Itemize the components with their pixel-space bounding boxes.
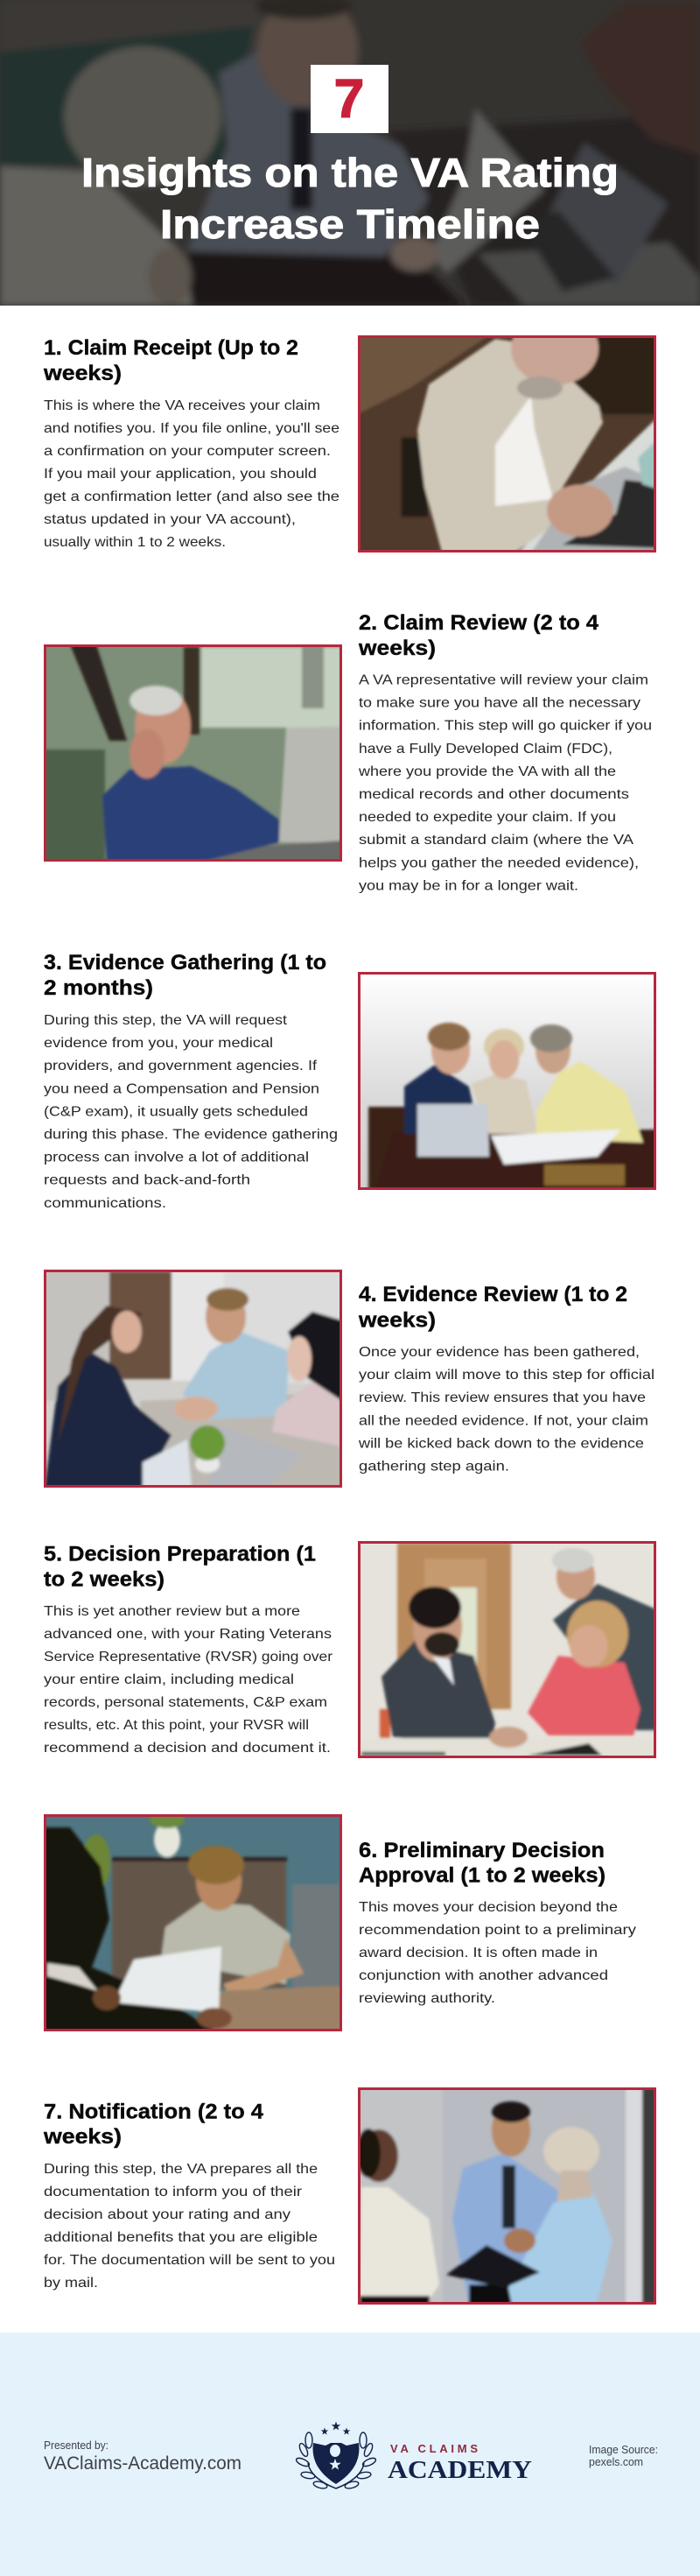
text block: step 7: decision about your rating and any <box>44 2207 290 2222</box>
text block: step 2: information. This step will go quicker if you <box>359 719 652 734</box>
text block: step 4: your claim will move to this step for official <box>359 1368 654 1383</box>
text block: step 3: you need a Compensation and Pension <box>44 1081 319 1096</box>
heading: step 7: 7. Notification (2 to 4 <box>44 2100 263 2123</box>
text block: step 2: where you provide the VA with all the <box>358 764 616 779</box>
photo: man on phone at laptop <box>44 644 342 862</box>
title: Insights on the VA Rating <box>81 150 619 195</box>
heading: step 7: weeks) <box>43 2125 122 2149</box>
heading: step 3 <box>44 951 326 1000</box>
heading: step 3: 3. Evidence Gathering (1 to <box>44 951 326 975</box>
heading: step 1: weeks) <box>43 362 122 385</box>
text block: step 4: will be kicked back down to the evidence <box>358 1436 644 1451</box>
heading: step 5 <box>44 1542 316 1591</box>
text block: step 2: A VA representative will review your claim <box>359 672 648 688</box>
text block: step 1: status updated in your VA account), <box>44 512 296 527</box>
text block: step 7: by mail. <box>44 2276 98 2291</box>
text block: step 3: (C&P exam), it usually gets scheduled <box>44 1104 308 1119</box>
text block: step 3: During this step, the VA will request <box>44 1013 288 1028</box>
text block: step 2: to make sure you have all the necessary <box>359 696 640 711</box>
text block: step 6 <box>359 1900 636 2006</box>
heading: step 3: 2 months) <box>44 976 153 1000</box>
text block: step 3: during this phase. The evidence gathering <box>44 1128 338 1142</box>
text block: step 6: conjunction with another advanced <box>359 1968 608 1983</box>
title: Increase Timeline <box>160 201 540 247</box>
text block: step 4: gathering step again. <box>359 1459 509 1475</box>
number badge: 7 <box>334 69 364 130</box>
text block: step 3: evidence from you, your medical <box>44 1036 273 1051</box>
logo wordmark: ACADEMY <box>388 2456 532 2484</box>
text block: step 1 <box>44 398 340 550</box>
text block: step 2: needed to expedite your claim. If you <box>359 810 616 825</box>
panel: step 6 preliminary decision approval <box>44 1811 636 2031</box>
text block: step 6: This moves your decision beyond the <box>359 1900 618 1915</box>
text block: step 3: communications. <box>44 1196 166 1211</box>
heading: step 6: Approval (1 to 2 weeks) <box>359 1863 606 1887</box>
heading: step 2: weeks) <box>358 637 436 660</box>
text block: step 1: a confirmation on your computer screen. <box>44 444 331 459</box>
heading: step 4 <box>358 1283 627 1333</box>
text block: step 5: Service Representative (RVSR) going over <box>44 1650 333 1665</box>
text block: step 2: helps you gather the needed evidence), <box>359 855 639 870</box>
text block: step 5 <box>44 1604 333 1756</box>
text block: step 4: Once your evidence has been gathered, <box>359 1345 640 1360</box>
logo: VA Claims Academy <box>295 2422 532 2489</box>
image source <box>589 2443 658 2468</box>
text block: step 1: and notifies you. If you file online, you'll see <box>44 421 340 436</box>
photo: agent meeting couple <box>44 1270 342 1488</box>
text block: step 6: recommendation point to a preliminary <box>359 1923 636 1938</box>
heading: step 7 <box>43 2100 263 2149</box>
text block: step 6: reviewing authority. <box>359 1991 495 2006</box>
photo: man across desk with paper <box>44 1814 342 2031</box>
text block: step 6: award decision. It is often made in <box>359 1946 598 1960</box>
text block: step 3: providers, and government agencies. If <box>44 1059 318 1073</box>
text block: step 2: have a Fully Developed Claim (FDC), <box>359 742 612 757</box>
text block: step 7: documentation to inform you of their <box>44 2185 303 2199</box>
logo wordmark <box>388 2442 532 2484</box>
photo: colleagues shaking hands <box>358 2087 656 2305</box>
panel: step 2 claim review <box>44 611 652 893</box>
text block: step 4 <box>358 1345 654 1475</box>
photo: man typing on laptop <box>358 335 656 553</box>
text block: step 1: get a confirmation letter (and also see the <box>44 489 340 504</box>
hero photo <box>0 0 700 306</box>
text block: step 5: your entire claim, including medical <box>44 1672 294 1687</box>
panel: step 4 evidence review <box>44 1270 654 1488</box>
text block: step 3: process can involve a lot of additional <box>44 1151 309 1165</box>
footer <box>0 2333 700 2576</box>
text block: step 2: medical records and other documents <box>359 787 629 802</box>
photo: man signing with couple <box>358 1541 656 1758</box>
title <box>81 150 619 247</box>
text block: step 2: you may be in for a longer wait. <box>359 878 578 893</box>
hero banner <box>0 0 700 306</box>
text block: step 7: for. The documentation will be sent to you <box>44 2253 335 2268</box>
panel: step 5 decision preparation <box>44 1541 656 1758</box>
text block: step 5: results, etc. At this point, your RVSR will <box>44 1718 309 1733</box>
text block: step 7 <box>44 2162 335 2291</box>
text block: step 7: During this step, the VA prepares all the <box>44 2162 318 2177</box>
presented by: Presented by: <box>44 2439 108 2452</box>
presented by: VAClaims-Academy.com <box>44 2453 242 2474</box>
text block: step 1: This is where the VA receives your claim <box>44 398 320 413</box>
heading: step 6 <box>359 1839 606 1887</box>
text block: step 3 <box>44 1013 338 1211</box>
text block: step 1: usually within 1 to 2 weeks. <box>44 535 226 550</box>
heading: step 2: 2. Claim Review (2 to 4 <box>359 611 598 635</box>
text block: step 5: recommend a decision and document it. <box>44 1741 331 1756</box>
logo wordmark: VA CLAIMS <box>390 2442 478 2455</box>
heading: step 2 <box>358 611 598 660</box>
presented by <box>44 2439 242 2474</box>
panel: step 1 claim receipt <box>43 312 656 553</box>
text block: step 5: advanced one, with your Rating Veterans <box>44 1627 332 1642</box>
image source: Image Source: <box>589 2443 658 2456</box>
text block: step 4: review. This review ensures that you have <box>359 1390 646 1405</box>
text block: step 4: all the needed evidence. If not, your claim <box>359 1413 648 1428</box>
panel: step 3 evidence gathering <box>44 951 656 1211</box>
text block: step 3: requests and back-and-forth <box>44 1173 250 1188</box>
text block: step 5: This is yet another review but a more <box>44 1604 300 1619</box>
heading: step 5: to 2 weeks) <box>44 1567 164 1591</box>
heading: step 5: 5. Decision Preparation (1 <box>44 1542 316 1566</box>
text block: step 2 <box>358 672 652 893</box>
text block: step 5: records, personal statements, C&P exam <box>44 1695 327 1710</box>
heading: step 4: 4. Evidence Review (1 to 2 <box>359 1283 627 1306</box>
image source: pexels.com <box>589 2455 643 2468</box>
panel: step 7 notification <box>43 2087 656 2305</box>
number badge <box>311 65 388 133</box>
text block: step 2: submit a standard claim (where the VA <box>359 833 634 848</box>
text block: step 7: additional benefits that you are eligible <box>44 2230 318 2245</box>
photo: three people at table <box>358 972 656 1190</box>
heading: step 1 <box>43 336 298 385</box>
heading: step 4: weeks) <box>358 1308 436 1333</box>
heading: step 6: 6. Preliminary Decision <box>359 1839 605 1862</box>
icon: eagle crest <box>295 2422 377 2489</box>
text block: step 1: If you mail your application, you should <box>44 467 317 482</box>
heading: step 1: 1. Claim Receipt (Up to 2 <box>44 336 298 360</box>
